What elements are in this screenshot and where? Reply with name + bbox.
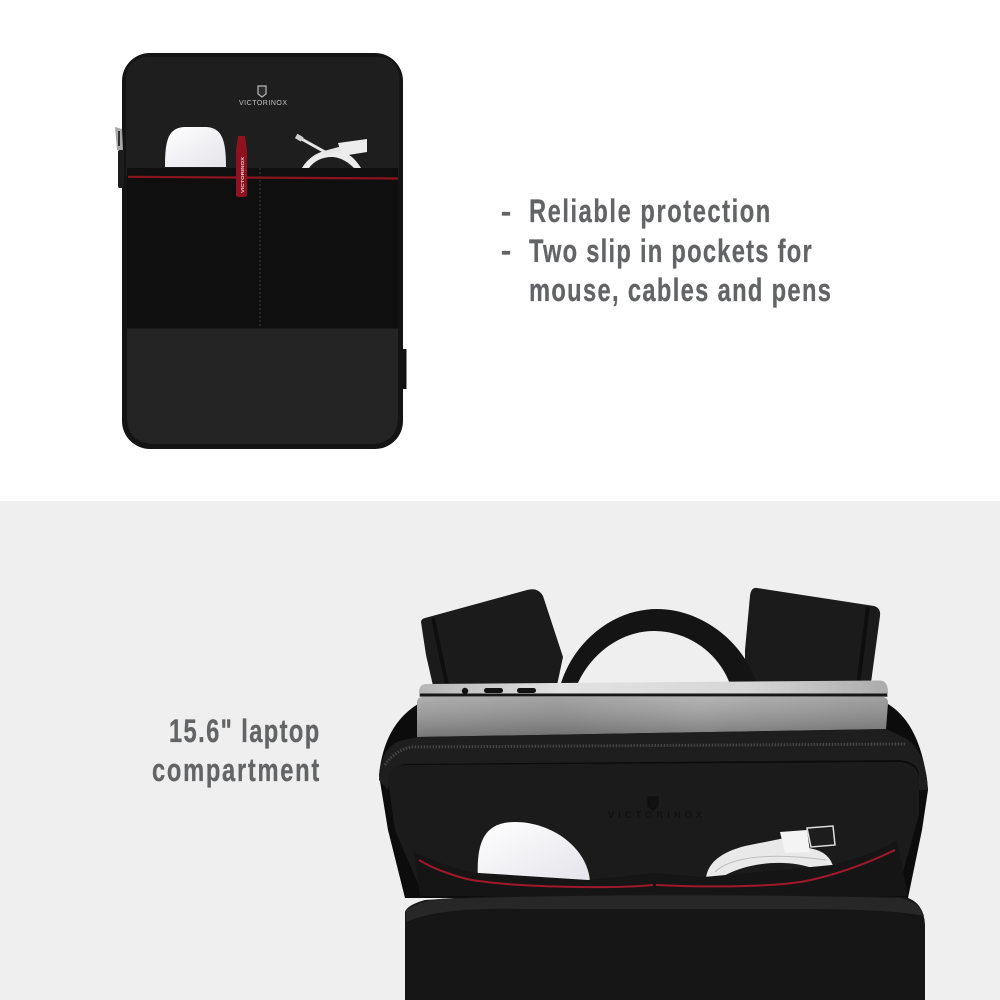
front zipper band — [406, 895, 924, 922]
usb-c port — [517, 688, 536, 693]
brand name: VICTORINOX — [239, 100, 287, 107]
red pocket piping — [419, 850, 895, 887]
feature: slip in pockets: Two slip in pockets for — [529, 234, 812, 269]
sleeve product — [115, 53, 406, 449]
laptop — [417, 680, 888, 737]
side tab — [403, 349, 406, 389]
lower background band — [0, 501, 1000, 1000]
pocket divider seam — [259, 168, 261, 326]
zipper pull — [115, 127, 124, 188]
bullet dash — [502, 212, 510, 216]
backpack product — [379, 588, 928, 1000]
laptop lid — [417, 697, 888, 737]
feature: reliable protection: Reliable protection — [529, 194, 770, 229]
icon: embossed shield — [648, 797, 658, 810]
icon: shield — [258, 86, 266, 97]
sleeve pocket panel — [127, 168, 398, 329]
icon: cable — [295, 134, 367, 168]
front pocket — [414, 840, 908, 896]
left shoulder strap — [421, 589, 563, 690]
bullet dash — [502, 251, 510, 254]
usb-c port — [484, 688, 503, 693]
icon: mouse — [165, 127, 226, 167]
text block: sleeve features — [502, 194, 831, 308]
laptop size: 15.6" laptop — [169, 714, 319, 749]
feature continuation: mouse, cables and pens — [529, 273, 831, 308]
text block: laptop compartment — [152, 714, 320, 788]
embossed logo — [608, 797, 702, 820]
pen tag — [236, 136, 247, 197]
zipper band — [379, 729, 928, 790]
red piping — [128, 177, 398, 178]
inner panel — [388, 762, 919, 893]
compartment word: compartment — [152, 753, 320, 788]
embossed brand: VICTORINOX — [608, 810, 702, 820]
cable in pocket — [706, 826, 835, 878]
sleeve upper panel — [126, 57, 399, 176]
audio port — [462, 688, 468, 694]
backpack rear shell — [379, 704, 928, 898]
right shoulder strap — [745, 588, 880, 690]
brand logo — [239, 86, 287, 107]
sleeve lower panel — [127, 328, 398, 444]
sleeve body — [122, 53, 403, 449]
strap seams — [433, 607, 868, 685]
laptop base — [419, 680, 888, 697]
carry handle — [559, 609, 759, 690]
pen tag: VICTORINOX — [240, 157, 245, 193]
front compartment — [405, 893, 925, 1000]
mouse in pocket — [478, 822, 590, 882]
